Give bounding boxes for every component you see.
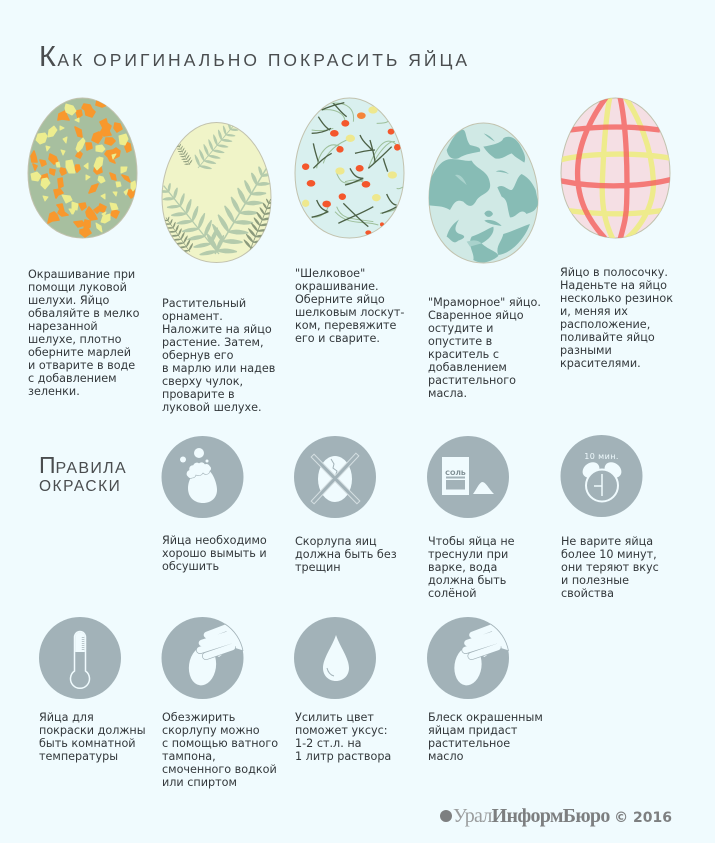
icon: cracked shell: [294, 436, 376, 518]
text: silk method: "Шелковое": [295, 267, 365, 280]
text: plant ornament method: в марлю или надев: [162, 362, 275, 375]
text: onion husk method: шелухе, плотно: [28, 333, 122, 346]
text: striped method: Наденьте на яйцо: [560, 279, 667, 292]
icon: washing egg: [162, 436, 244, 518]
text: marble method: масла.: [428, 387, 467, 400]
text: onion husk method: шелухи. Яйцо: [28, 294, 110, 307]
text: plant ornament method: обернув его: [162, 349, 234, 362]
text: rule degrease: тампона,: [162, 750, 216, 763]
text: marble method: опустите в: [428, 335, 492, 348]
text: rule time: Не варите яйца: [561, 535, 653, 548]
text: rule cracks: Скорлупа яиц: [295, 535, 377, 548]
text: striped method: поливайте яйцо: [560, 331, 655, 344]
text: rule time: и полезные: [561, 574, 629, 587]
footer: credit: УралИнформБюро: [453, 805, 610, 827]
text: onion husk method: и отварите в воде: [28, 359, 135, 372]
text: rule salt: должна быть: [428, 574, 506, 587]
text: plant ornament method: проварите в: [162, 388, 235, 401]
text: onion husk method: обваляйте в мелко: [28, 307, 140, 320]
text: rule temperature: Яйца для: [39, 711, 94, 724]
footer: credit: © 2016: [614, 810, 672, 826]
icon: hand oiling egg: [427, 617, 510, 699]
text: rule vinegar: 1-2 ст.л. на: [295, 737, 362, 750]
text: silk method: окрашивание.: [295, 280, 379, 293]
text: rule degrease: Обезжирить: [162, 711, 235, 724]
panel: fern egg: [162, 122, 272, 263]
text: rule time: более 10 минут,: [561, 548, 657, 561]
text: rule oil: масло: [428, 750, 464, 763]
text: onion husk method: зеленки.: [28, 385, 80, 398]
icon: thermometer: [39, 617, 121, 699]
heading: rules: ПРАВИЛА: [39, 452, 127, 478]
text: marble method: добавлением: [428, 361, 507, 374]
text: silk method: шелковым лоскут-: [295, 306, 404, 319]
text: striped method: Яйцо в полосочку.: [560, 266, 668, 279]
heading: rules: ОКРАСКИ: [39, 478, 121, 495]
text: rule oil: яйцам придаст: [428, 724, 518, 737]
panel: marble egg: [427, 123, 538, 263]
text: rule time: они теряют вкус: [561, 561, 659, 574]
text: marble method: остудите и: [428, 322, 493, 335]
text: rule salt: варке, вода: [428, 561, 497, 574]
text: plant ornament method: орнамент.: [162, 310, 223, 323]
title: КАК ОРИГИНАЛЬНО ПОКРАСИТЬ ЯЙЦА: [39, 41, 470, 73]
text: rule time: свойства: [561, 587, 614, 600]
text: plant ornament method: луковой шелухе.: [162, 401, 262, 414]
text: plant ornament method: Наложите на яйцо: [162, 323, 272, 336]
text: onion husk method: с добавлением: [28, 372, 117, 385]
text: rule vinegar: 1 литр раствора: [295, 750, 391, 763]
panel: silk print egg: [295, 98, 405, 238]
panel: onion husk egg: [28, 98, 137, 238]
icon: alarm clock: 10 мин.: [584, 452, 619, 461]
text: rule vinegar: поможет уксус:: [295, 724, 388, 737]
icon: salt box: СОЛЬ: [445, 469, 466, 477]
text: marble method: "Мраморное" яйцо.: [428, 296, 541, 309]
text: silk method: Оберните яйцо: [295, 293, 385, 306]
text: onion husk method: помощи луковой: [28, 281, 127, 294]
text: onion husk method: нарезанной: [28, 320, 98, 333]
text: rule salt: треснули при: [428, 548, 508, 561]
text: marble method: Сваренное яйцо: [428, 309, 524, 322]
text: rule wash: обсушить: [162, 560, 219, 573]
icon: alarm clock: [560, 435, 642, 517]
text: striped method: разными: [560, 344, 612, 357]
text: rule wash: хорошо вымыть и: [162, 547, 267, 560]
text: onion husk method: оберните марлей: [28, 346, 131, 359]
text: striped method: красителями.: [560, 357, 641, 370]
text: rule cracks: должна быть без: [295, 548, 397, 561]
text: silk method: ком, перевяжите: [295, 319, 397, 332]
text: rule degrease: или спиртом: [162, 776, 237, 789]
text: plant ornament method: сверху чулок,: [162, 375, 243, 388]
text: plant ornament method: растение. Затем,: [162, 336, 264, 349]
text: rule temperature: быть комнатной: [39, 737, 136, 750]
icon: salt box: [427, 436, 509, 518]
text: rule degrease: смоченного водкой: [162, 763, 277, 776]
icon: vinegar drop: [294, 617, 376, 699]
text: rule salt: Чтобы яйца не: [428, 535, 515, 548]
text: striped method: расположение,: [560, 318, 650, 331]
icon: hand degreasing egg: [162, 617, 245, 699]
text: plant ornament method: Растительный: [162, 297, 246, 310]
text: rule oil: Блеск окрашенным: [428, 711, 543, 724]
text: onion husk method: Окрашивание при: [28, 268, 135, 281]
text: rule wash: Яйца необходимо: [162, 534, 267, 547]
footer: credit: [440, 805, 672, 827]
text: rule vinegar: Усилить цвет: [295, 711, 374, 724]
text: striped method: и, меняя их: [560, 305, 628, 318]
text: marble method: краситель с: [428, 348, 499, 361]
text: rule degrease: с помощью ватного: [162, 737, 278, 750]
text: rule temperature: температуры: [39, 750, 118, 763]
text: rule temperature: покраски должны: [39, 724, 146, 737]
text: marble method: растительного: [428, 374, 516, 387]
text: rule oil: растительное: [428, 737, 510, 750]
text: rule degrease: скорлупу можно: [162, 724, 260, 737]
text: striped method: несколько резинок: [560, 292, 673, 305]
panel: striped egg: [560, 97, 672, 240]
text: rule salt: солёной: [428, 587, 476, 600]
text: silk method: его и сварите.: [295, 332, 380, 345]
text: rule cracks: трещин: [295, 561, 341, 574]
